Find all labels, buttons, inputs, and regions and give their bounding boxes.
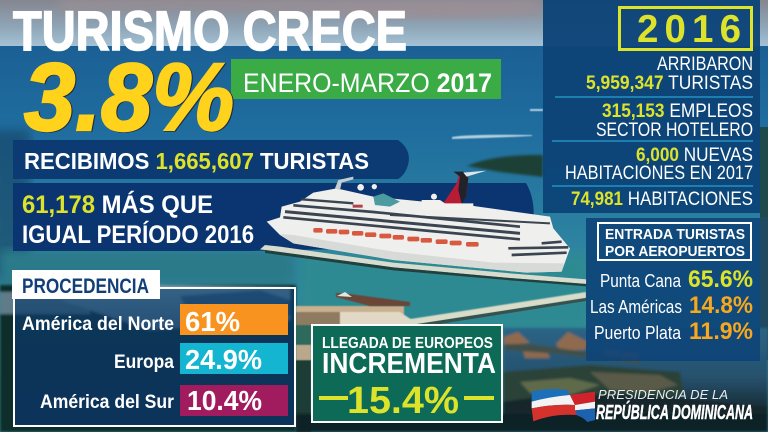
stat: empleos: 315,153 EMPLEOS [602,101,753,122]
stat: arribaron: ARRIBARON [657,54,753,75]
headline percentage: 3.8% [25,44,235,152]
funnel [443,172,468,204]
logo: presidencia [532,387,753,424]
row: Europa: Europa [114,351,174,373]
main pier [260,245,587,284]
row: Europa [114,343,288,375]
airports heading: POR AEROPUERTOS [605,243,745,260]
right bay and islet [296,328,768,432]
row: America del Sur: 10.4% [187,385,262,416]
bar: 61,178 mas que [13,183,534,251]
panel: 2016 stats [543,0,760,213]
row: America del Sur: América del Sur [40,391,174,413]
text: mas que igual periodo: 61,178 MÁS QUE [22,190,213,219]
row: Las Americas: Las Américas [590,297,682,317]
headline percentage: 3.8% [24,44,234,151]
row: Europa: 24.9% [185,344,262,375]
green date badge: ENERO-MARZO 2017 [243,68,492,98]
stat: habitaciones: 74,981 HABITACIONES [571,189,753,210]
procedencia label: PROCEDENCIA [22,275,149,298]
cruise ship [260,171,587,286]
row: Punta Cana: 65.6% [688,266,753,293]
title: TURISMO CRECE [13,0,407,62]
stat: empleos [596,101,753,141]
airports heading [598,223,751,260]
row: Punta Cana: Punta Cana [600,271,682,291]
stat: nuevas habitaciones: 6,000 NUEVAS [636,145,753,166]
stat: arribaron [586,54,753,94]
row: America del Norte: 61% [185,306,240,337]
2016 heading box: 2016 [637,8,741,51]
land lower left [0,285,296,432]
panel: procedencia [12,270,295,426]
dark window decks [283,199,568,255]
text: recibimos: RECIBIMOS 1,665,607 TURISTAS [24,148,369,174]
hull [267,188,570,273]
icon: flag [532,389,595,422]
text: mas que igual periodo [22,190,254,249]
small boat [337,292,352,297]
airports heading: ENTRADA TURISTAS [605,226,745,243]
increase figure: 15.4% [347,380,459,422]
text: mas que igual periodo: IGUAL PERÍODO 2016 [22,220,254,249]
row: Las Americas: 14.8% [689,292,753,319]
stat: nuevas habitaciones [565,145,753,184]
row: Puerto Plata [594,318,753,345]
row: Las Americas [590,292,753,319]
row: America del Norte: América del Norte [22,313,174,335]
row: America del Norte [22,304,288,337]
procedencia label [12,270,160,299]
row: Puerto Plata: 11.9% [689,318,753,345]
far island [467,155,543,177]
panel: airports [586,218,760,361]
row: Puerto Plata: Puerto Plata [594,323,682,343]
mast and domes [335,177,353,190]
panel: europeos [312,325,502,422]
bar: recibimos [13,140,409,179]
row: Punta Cana [600,266,753,293]
wave highlights [452,109,543,139]
logo: presidencia: PRESIDENCIA DE LA [598,387,728,402]
panel: europeos: LLEGADA DE EUROPEOS [322,335,493,352]
stat: arribaron: 5,959,347 TURISTAS [586,73,753,94]
panel: europeos: INCREMENTA [322,348,496,380]
increase figure [319,380,494,422]
small boat pier [336,293,410,306]
lifeboats [313,228,479,247]
row: America del Sur [40,385,288,416]
lower pier [404,292,586,326]
buildings beside panels [296,306,412,432]
